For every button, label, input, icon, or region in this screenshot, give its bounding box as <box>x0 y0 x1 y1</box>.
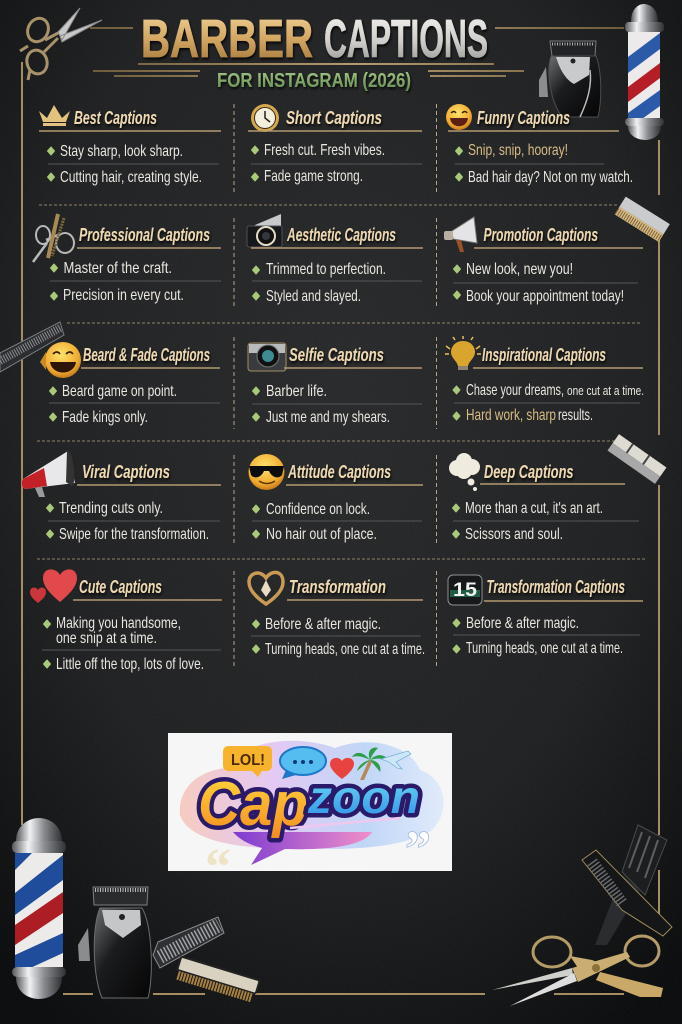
heading: Beard & Fade Captions <box>83 345 210 365</box>
heading: Best Captions <box>74 108 157 128</box>
panel: professional captions <box>33 214 221 304</box>
heart <box>330 758 354 779</box>
icon: comb left <box>0 322 64 372</box>
icon: number 15 tile <box>448 575 482 605</box>
caption list: Snip, snip, hooray! <box>468 142 568 159</box>
panel: funny captions <box>446 104 633 186</box>
caption list: Master of the craft. <box>64 260 172 277</box>
caption list: Book your appointment today! <box>466 288 624 305</box>
chat bubble <box>280 747 326 779</box>
heading: Professional Captions <box>79 225 210 245</box>
icon: bottom right combs <box>582 825 672 945</box>
caption list: Styled and slayed. <box>266 288 361 305</box>
quote marks <box>205 821 431 896</box>
caption list <box>252 383 390 426</box>
caption list: results. <box>558 407 593 424</box>
caption list: Stay sharp, look sharp. <box>60 143 183 160</box>
icon: light bulb <box>445 336 481 370</box>
caption list <box>252 616 425 658</box>
subtitle: FOR INSTAGRAM (2026) <box>217 70 411 92</box>
title: captions: CAPTIONS <box>324 9 488 69</box>
icon: top barber pole <box>625 4 664 140</box>
panel: beard and fade captions <box>40 342 220 426</box>
caption list: Precision in every cut. <box>63 287 184 304</box>
wordmark <box>198 770 420 839</box>
lol bubble <box>223 746 272 777</box>
caption list: Hard work, sharp <box>466 407 556 424</box>
caption list: Confidence on lock. <box>266 501 370 518</box>
caption list <box>252 501 377 543</box>
caption list: Cutting hair, creating style. <box>60 169 202 186</box>
caption list: More than a cut, it's an art. <box>465 500 603 517</box>
wordmark: zoon <box>307 771 420 823</box>
icon: hearts <box>30 569 77 603</box>
panel: inspirational captions <box>445 336 644 424</box>
panel: promotion captions <box>444 217 643 305</box>
heading: Attitude Captions <box>287 462 391 482</box>
heading: Viral Captions <box>82 462 170 482</box>
panel: transformation <box>249 572 425 658</box>
caption list <box>46 500 209 543</box>
caption list: Barber life. <box>266 383 327 400</box>
icon: laughing emoji <box>446 104 472 130</box>
icon: bottom clipper <box>78 887 151 998</box>
caption list: Swipe for the transformation. <box>59 526 209 543</box>
caption list <box>252 261 386 305</box>
caption list <box>44 615 204 673</box>
icon: thought bubble <box>449 453 480 491</box>
caption list <box>252 142 385 185</box>
title block <box>90 9 624 92</box>
icon: clipper blade right <box>608 434 666 484</box>
caption list: Just me and my shears. <box>266 409 390 426</box>
caption list: Beard game on point. <box>62 383 177 400</box>
icon: bottom right scissors <box>492 936 663 1006</box>
icon: top scissors <box>20 8 102 80</box>
speech bubble tail <box>233 832 372 865</box>
icon: selfie camera <box>248 336 286 371</box>
lol bubble: LOL! <box>231 752 265 769</box>
caption list <box>50 383 177 426</box>
icon: razor tool right <box>615 197 670 242</box>
icon: camera <box>247 214 282 247</box>
icon: crown <box>39 105 70 126</box>
quote marks: “ <box>205 839 231 896</box>
heading: Deep Captions <box>484 462 574 482</box>
icon: number 15 tile: 15 <box>453 580 477 601</box>
title: barber: BARBER <box>141 9 313 69</box>
panel: transformation captions <box>448 575 643 657</box>
icon: beard emoji <box>40 342 81 378</box>
caption list: Fade game strong. <box>264 168 363 185</box>
panel: cute captions <box>30 569 222 673</box>
panel: short captions <box>248 104 422 185</box>
caption list <box>453 382 644 424</box>
caption list <box>48 143 202 186</box>
caption list: Fresh cut. Fresh vibes. <box>264 142 385 159</box>
logo: capzoon <box>168 733 452 896</box>
caption list: one snip at a time. <box>56 630 157 647</box>
icon: red megaphone <box>22 450 75 497</box>
plane <box>381 751 411 769</box>
icon: bottom gold trimmer <box>176 957 260 999</box>
icon: bottom comb <box>153 917 224 968</box>
caption list: Little off the top, lots of love. <box>56 656 204 673</box>
caption list <box>50 260 184 304</box>
heading: Short Captions <box>286 108 382 128</box>
panel: aesthetic captions <box>247 214 423 305</box>
caption list: Chase your dreams, <box>466 382 564 399</box>
wordmark: Cap <box>198 770 308 839</box>
panel: deep captions <box>449 453 639 543</box>
caption list <box>452 500 603 543</box>
icon: megaphone <box>444 217 477 252</box>
quote marks: ” <box>405 821 431 878</box>
caption list: Before & after magic. <box>466 615 579 632</box>
heading: Promotion Captions <box>484 225 598 245</box>
palm tree <box>352 748 389 780</box>
caption list <box>453 615 623 657</box>
icon: sunglasses emoji <box>248 454 284 490</box>
panel: best captions <box>39 105 221 186</box>
panel: selfie captions <box>248 336 422 426</box>
caption list: Scissors and soul. <box>465 526 563 543</box>
heading: Aesthetic Captions <box>286 225 396 245</box>
caption list <box>454 261 624 305</box>
caption list: Before & after magic. <box>265 616 381 633</box>
heading: Inspirational Captions <box>482 345 606 365</box>
heading: Selfie Captions <box>289 345 384 365</box>
caption list: Turning heads, one cut at a time. <box>265 641 425 658</box>
panel: viral captions <box>22 450 221 543</box>
caption list: New look, new you! <box>466 261 573 278</box>
icon: bottom barber pole <box>12 818 66 999</box>
caption list: Fade kings only. <box>62 409 148 426</box>
panel: attitude captions <box>248 454 423 543</box>
caption list: one cut at a time. <box>567 383 644 398</box>
caption list: Trimmed to perfection. <box>266 261 386 278</box>
caption list <box>456 142 633 186</box>
icon: clock <box>251 104 279 132</box>
caption list: Trending cuts only. <box>59 500 163 517</box>
heading: Transformation <box>289 577 386 597</box>
caption list: Making you handsome, <box>56 615 181 632</box>
icon: gold heart pin <box>249 572 283 604</box>
icon: scissors and comb <box>33 214 74 262</box>
caption list: No hair out of place. <box>266 526 377 543</box>
heading: Funny Captions <box>477 108 570 128</box>
heading: Cute Captions <box>79 577 162 597</box>
icon: top clipper <box>539 41 601 117</box>
